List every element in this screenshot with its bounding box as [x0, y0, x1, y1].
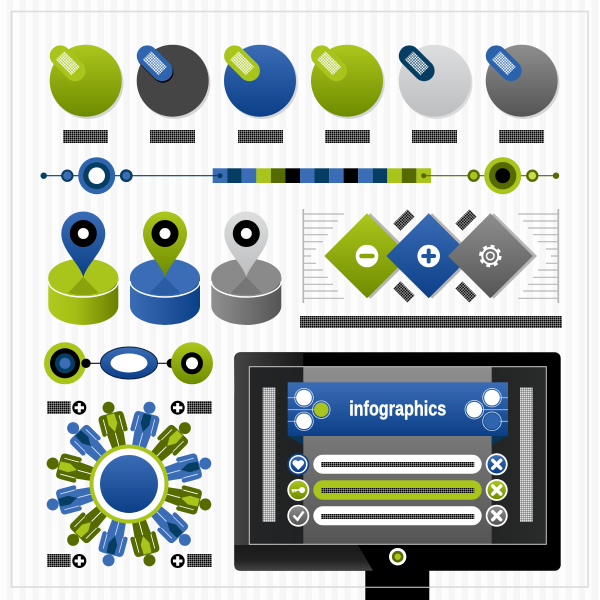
right node line: [421, 157, 559, 194]
timeline strip: [40, 157, 559, 194]
screen: [249, 367, 546, 544]
banner title: infographics: [349, 399, 446, 421]
badge 3 blue: [220, 41, 298, 119]
icon: lime close button: [486, 479, 508, 501]
diamond lime with minus: [324, 213, 414, 299]
icon: key button: [287, 479, 309, 501]
pin cylinder grey: [211, 212, 281, 325]
centre oval: [100, 347, 158, 379]
left comb: [303, 209, 344, 303]
people ring: [44, 399, 214, 569]
panel: badge circles row: [45, 41, 559, 119]
diamond blue with plus: [386, 213, 476, 299]
frame line over stand: [365, 586, 429, 588]
stand: [365, 568, 429, 600]
bezel: [234, 352, 561, 571]
icon: grey close button: [486, 505, 508, 527]
badge 2 dark: [132, 41, 210, 119]
monitor: [234, 352, 561, 600]
pin cylinder blue: [130, 212, 200, 325]
panel: diamonds with combs: [300, 209, 562, 328]
pin cylinder lime: [48, 212, 118, 325]
icon: blue close button: [486, 453, 508, 475]
side dotted columns: [263, 387, 533, 522]
hatched tabs: [393, 209, 477, 303]
people wheel: [44, 399, 214, 569]
right comb: [518, 209, 558, 303]
diamond grey with gear: [448, 213, 537, 299]
left lime ring: [44, 342, 86, 384]
icon: check button: [287, 505, 309, 527]
corner dotted labels with plus buttons: [47, 401, 212, 568]
dotted band: [300, 316, 562, 328]
badge 6 grey: [481, 41, 560, 119]
linked rings connector: [44, 342, 213, 384]
power button: [389, 548, 406, 565]
left node line: [40, 157, 223, 194]
badge 5 silver: [394, 41, 472, 119]
panel: pins on cylinders: [48, 212, 281, 325]
central hub: [90, 444, 168, 524]
badge 4 lime: [307, 41, 385, 119]
colour strip: [213, 168, 431, 183]
right lime ring: [171, 342, 213, 384]
badge captions dotted: [63, 130, 544, 143]
icon: heart button: [287, 453, 309, 475]
list rows: [313, 455, 482, 525]
banner: [288, 382, 508, 445]
badge 1 lime: [45, 41, 124, 119]
